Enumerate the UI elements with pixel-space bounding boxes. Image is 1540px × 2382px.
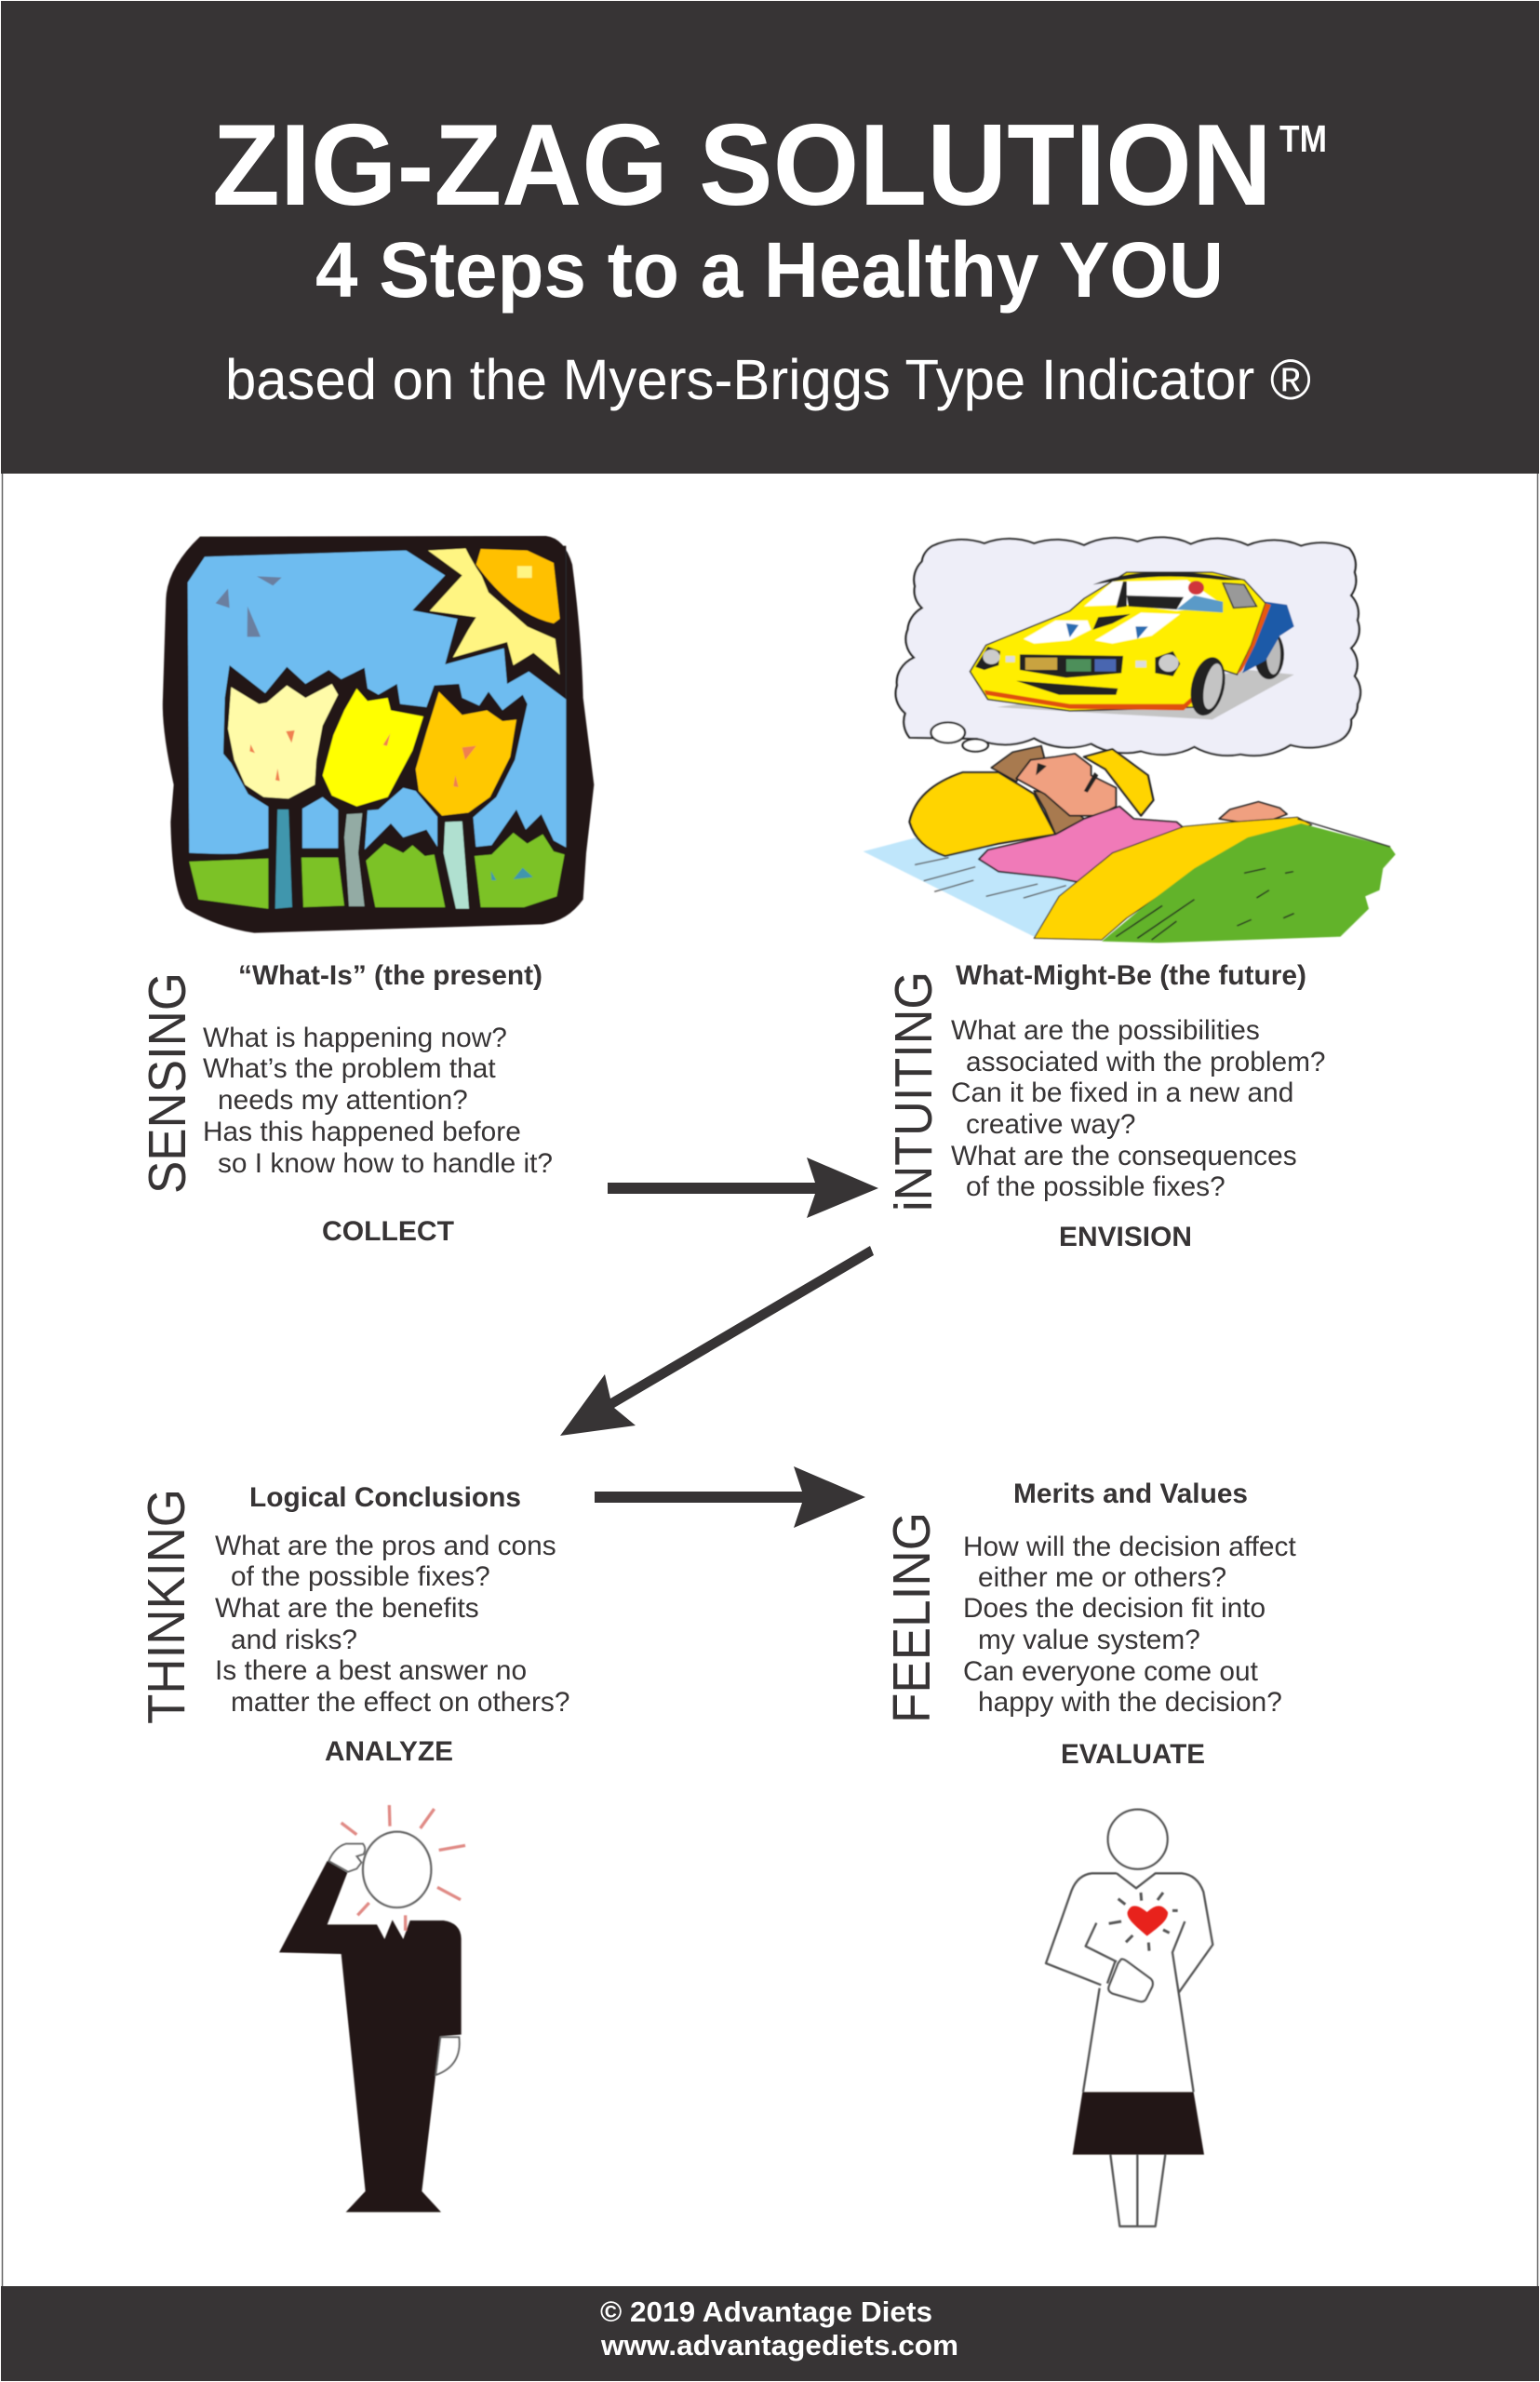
panel: sensing: [138, 536, 594, 1247]
vertical label: SENSING: SENSING: [138, 972, 197, 1194]
questions: thinking: What are the pros and cons: [215, 1531, 556, 1561]
questions: intuiting: creative way?: [966, 1109, 1135, 1140]
action label: evaluate: EVALUATE: [1061, 1739, 1205, 1770]
illustration: feeling woman: [1046, 1810, 1212, 2227]
questions: sensing: so I know how to handle it?: [218, 1148, 553, 1179]
questions: intuiting: of the possible fixes?: [966, 1171, 1225, 1202]
footer banner: [1, 2286, 1539, 2381]
arrow: sensing to intuiting: [608, 1158, 878, 1218]
panel: intuiting: [864, 537, 1396, 1252]
website: www.advantagediets.com: [600, 2329, 958, 2362]
subtitle: 4 Steps to a Healthy YOU: [315, 226, 1224, 314]
questions: feeling: my value system?: [978, 1625, 1200, 1655]
questions: thinking: of the possible fixes?: [231, 1561, 490, 1592]
sleeper in bed: [864, 746, 1396, 943]
illustration: tulips and sun: [163, 536, 594, 933]
action label: envision: ENVISION: [1059, 1222, 1192, 1252]
heading: merits and values: Merits and Values: [1013, 1479, 1248, 1509]
questions: thinking: and risks?: [231, 1625, 357, 1655]
questions: intuiting: What are the possibilities: [951, 1015, 1260, 1046]
title: ZIG-ZAG SOLUTION: [212, 101, 1272, 230]
questions: intuiting: associated with the problem?: [966, 1047, 1326, 1077]
questions: feeling: happy with the decision?: [978, 1687, 1282, 1718]
questions: intuiting: [951, 1015, 1326, 1202]
questions: feeling: Can everyone come out: [963, 1656, 1259, 1687]
questions: feeling: Does the decision fit into: [963, 1593, 1265, 1624]
illustration: thinking man: [279, 1805, 465, 2212]
vertical label: iNTUITING: iNTUITING: [884, 971, 944, 1211]
questions: sensing: [203, 1023, 553, 1179]
panel: thinking: [137, 1482, 569, 2212]
arrow: intuiting to thinking: [560, 1246, 874, 1436]
questions: sensing: What’s the problem that: [203, 1053, 496, 1084]
questions: thinking: What are the benefits: [215, 1593, 479, 1624]
action label: analyze: ANALYZE: [325, 1736, 453, 1767]
questions: intuiting: What are the consequences: [951, 1141, 1297, 1171]
questions: sensing: What is happening now?: [203, 1023, 507, 1053]
panel: feeling: [882, 1479, 1296, 2227]
header banner: [1, 1, 1539, 474]
questions: sensing: needs my attention?: [218, 1085, 468, 1116]
questions: feeling: either me or others?: [978, 1562, 1226, 1593]
vertical label: FEELING: FEELING: [882, 1512, 942, 1723]
arrow: thinking to feeling: [595, 1466, 865, 1528]
questions: feeling: How will the decision affect: [963, 1532, 1296, 1562]
heading: logical conclusions: Logical Conclusions: [249, 1482, 521, 1513]
action label: collect: COLLECT: [322, 1216, 454, 1247]
tagline: based on the Myers-Briggs Type Indicator ®: [225, 348, 1311, 411]
questions: intuiting: Can it be fixed in a new and: [951, 1077, 1293, 1108]
vertical label: THINKING: THINKING: [137, 1489, 196, 1724]
questions: thinking: Is there a best answer no: [215, 1655, 527, 1686]
questions: thinking: [215, 1531, 569, 1718]
thought bubble: [896, 537, 1360, 756]
questions: feeling: [963, 1532, 1296, 1718]
questions: sensing: Has this happened before: [203, 1117, 521, 1147]
car: [970, 571, 1294, 719]
illustration: sleeper dreaming of a car: [864, 537, 1396, 943]
trademark mark: TM: [1279, 117, 1327, 160]
questions: thinking: matter the effect on others?: [231, 1687, 569, 1718]
heading: what-is: “What-Is” (the present): [238, 960, 542, 991]
heading: what-might-be: What-Might-Be (the future): [956, 960, 1306, 991]
copyright: © 2019 Advantage Diets: [600, 2295, 932, 2328]
